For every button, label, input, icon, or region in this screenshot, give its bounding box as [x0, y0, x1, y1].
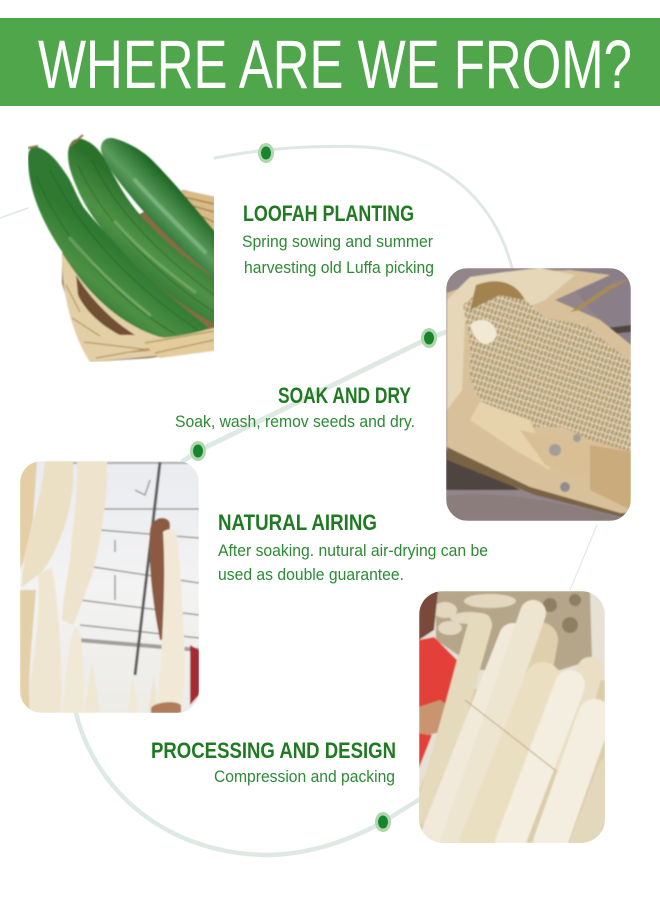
worker arm [149, 518, 170, 640]
heading and text: soak and dry: Soak, wash, remov seeds and dry. [175, 412, 415, 431]
held loofah [157, 529, 185, 713]
heading and text: processing and design [151, 738, 396, 786]
loofah: lower left [28, 567, 61, 713]
heading and text: soak and dry: SOAK AND DRY [278, 383, 411, 408]
process flow curve [0, 146, 597, 855]
loofah: far left [20, 461, 37, 570]
title banner [0, 18, 660, 106]
basket front rim [143, 326, 220, 358]
heading and text: natural airing: used as double guarantee. [218, 565, 404, 584]
step marker: processing [375, 812, 391, 832]
loofah: hanging [62, 461, 107, 625]
loofah: small hanging [63, 628, 84, 713]
loofah: large left [22, 461, 73, 587]
heading and text: loofah planting [242, 201, 434, 277]
heading and text: natural airing: NATURAL AIRING [218, 510, 377, 535]
photo: green luffa in basket [28, 135, 222, 362]
heading and text: natural airing: After soaking. nutural air-drying can be [218, 541, 488, 560]
gourd: front [28, 147, 208, 338]
photo: peeled dried loofah [446, 268, 631, 521]
worker [419, 591, 438, 640]
loofah bundle [419, 680, 605, 843]
step marker: airing [190, 441, 206, 461]
gourd: middle [68, 139, 222, 328]
heading and text: processing and design: PROCESSING AND DESIGN [151, 738, 396, 763]
heading and text: processing and design: Compression and packing [214, 767, 395, 786]
step marker: soak [421, 328, 437, 348]
gourd: back [101, 138, 222, 285]
step marker: planting [258, 143, 274, 163]
exposed fibre net [463, 282, 631, 452]
heading and text: natural airing [218, 510, 488, 584]
heading and text: loofah planting: harvesting old Luffa picking [244, 258, 434, 277]
photo: loofahs airing in greenhouse [20, 461, 199, 713]
heading and text: soak and dry [175, 383, 415, 431]
photo: processed loofahs with worker [419, 591, 610, 843]
gourd skin [447, 270, 631, 513]
heading and text: loofah planting: LOOFAH PLANTING [243, 201, 414, 226]
heading and text: loofah planting: Spring sowing and summer [242, 232, 433, 251]
